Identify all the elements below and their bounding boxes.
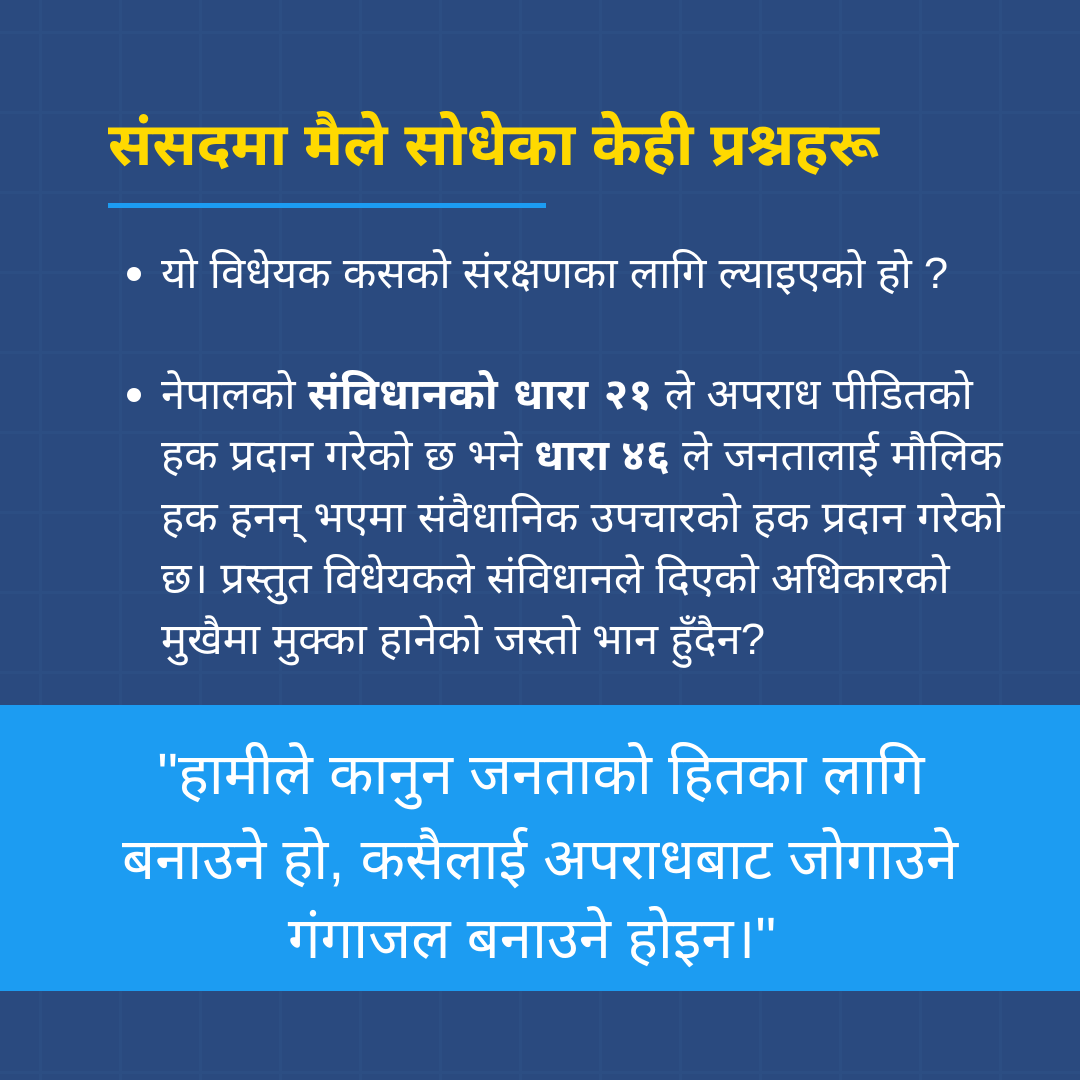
bullet text 2: हक हनन् भएमा संवैधानिक उपचारको हक प्रदान गरेको	[161, 494, 1004, 542]
bullet dot 2	[127, 388, 141, 402]
title underline	[108, 203, 546, 208]
bullet text 2: मुखैमा मुक्का हानेको जस्तो भान हुँदैन?	[161, 616, 765, 664]
bullet text 2	[161, 370, 1005, 668]
bullet text 2: छ। प्रस्तुत विधेयकले संविधानले दिएको अधिकारको	[161, 555, 950, 603]
title: संसदमा मैले सोधेका केही प्रश्नहरू	[108, 111, 879, 178]
quote text: बनाउने हो, कसैलाई अपराधबाट जोगाउने	[122, 827, 958, 892]
quote text: गंगाजल बनाउने होइन।"	[288, 906, 776, 971]
bullet text 1: यो विधेयक कसको संरक्षणका लागि ल्याइएको हो ?	[161, 250, 948, 298]
bullet text 2: नेपालको संविधानको धारा २१ ले अपराध पीडितको	[161, 371, 973, 419]
quote text	[122, 742, 959, 971]
quote band	[0, 705, 1080, 991]
bullet point 1	[127, 249, 948, 298]
bullet point 2	[127, 370, 1005, 668]
quote text: "हामीले कानुन जनताको हितका लागि	[157, 742, 925, 807]
bullet text 2: हक प्रदान गरेको छ भने धारा ४६ ले जनतालाई मौलिक	[161, 432, 1003, 480]
bullet dot 1	[127, 267, 141, 281]
